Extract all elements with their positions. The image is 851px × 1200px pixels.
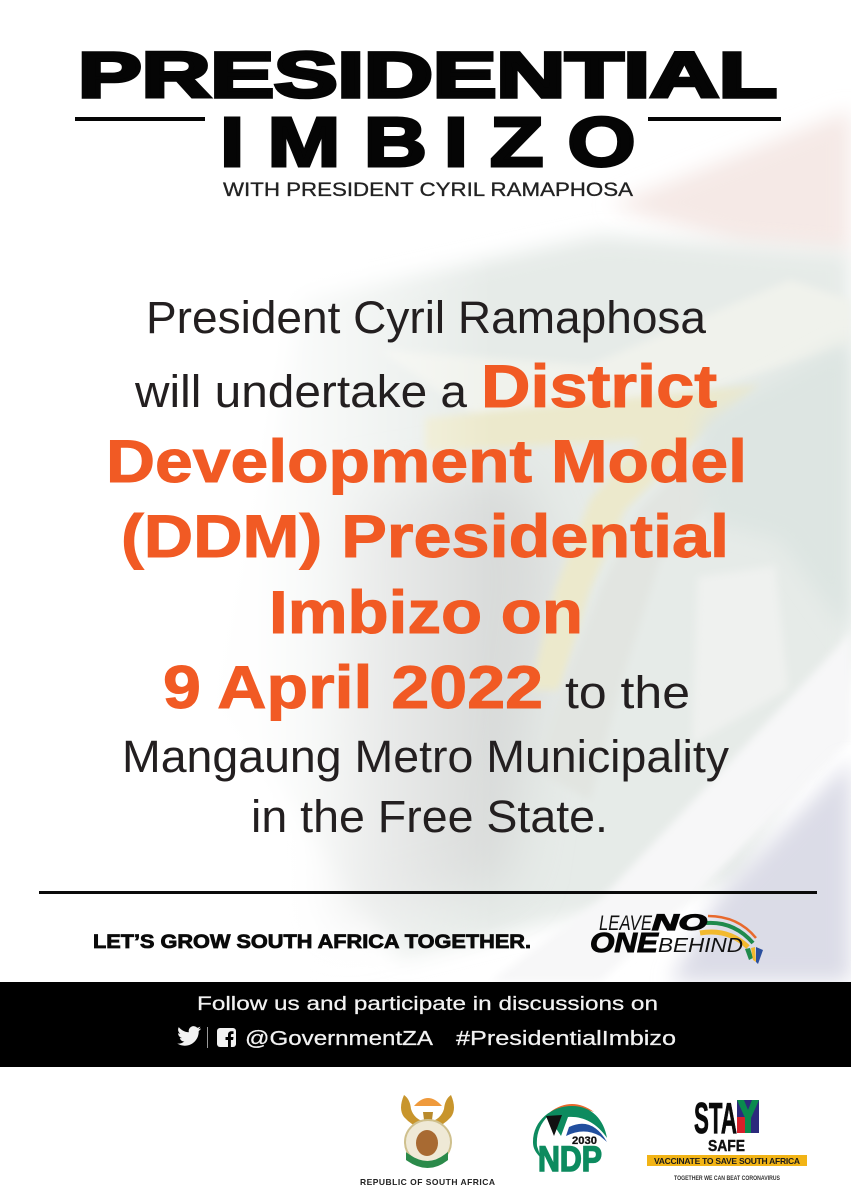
province line: in the Free State. — [251, 791, 608, 842]
icon: facebook — [217, 1028, 236, 1047]
stay flag Y — [737, 1100, 759, 1133]
title line: IMBIZO: IMBIZO — [220, 102, 636, 181]
logo words: LEAVE — [599, 912, 653, 935]
logo: Leave No One Behind — [590, 910, 763, 964]
vaccinate banner — [647, 1155, 807, 1166]
ndp arc blue — [566, 1124, 607, 1142]
arms sun — [414, 1098, 442, 1106]
safe word: SAFE — [708, 1138, 745, 1155]
hashtag: #PresidentialImbizo — [456, 1028, 676, 1050]
vaccinate text: VACCINATE TO SAVE SOUTH AFRICA — [654, 1156, 800, 1166]
arms right wing — [430, 1095, 454, 1130]
separator — [207, 1027, 208, 1048]
line 2 intro: will undertake a — [134, 366, 468, 417]
icon: twitter — [177, 1026, 201, 1046]
arms shield — [405, 1120, 451, 1164]
highlight: District: District — [481, 353, 717, 420]
line 1: President Cyril Ramaphosa — [146, 292, 707, 343]
arms bird — [423, 1112, 433, 1128]
rule right — [648, 117, 781, 121]
stay caption: TOGETHER WE CAN BEAT CORONAVIRUS — [674, 1176, 780, 1182]
divider rule — [39, 891, 817, 894]
logo: Leave No One Behind: NO — [652, 910, 707, 935]
social media band — [0, 982, 851, 1067]
ndp letters: NDP — [538, 1140, 602, 1179]
ndp ring green — [533, 1106, 607, 1158]
to the: to the — [565, 667, 690, 718]
logo: coat of arms — [360, 1095, 495, 1187]
highlight: Imbizo on: Imbizo on — [269, 579, 583, 646]
arms left wing — [401, 1095, 425, 1130]
logo: NDP 2030 — [533, 1104, 607, 1179]
logo flag ends — [745, 948, 753, 960]
logo: Stay Safe — [647, 1094, 807, 1182]
ndp year: 2030 — [572, 1135, 597, 1147]
subtitle: WITH PRESIDENT CYRIL RAMAPHOSA — [223, 180, 633, 201]
logo rainbow arcs — [700, 916, 756, 947]
ndp arc orange — [550, 1104, 594, 1112]
stay letters: STA — [694, 1094, 737, 1143]
band heading: Follow us and participate in discussions on — [197, 993, 658, 1015]
title — [75, 39, 781, 201]
highlight: Development Model: Development Model — [106, 428, 747, 495]
handle: @GovernmentZA — [245, 1028, 434, 1050]
highlight: date: 9 April 2022 — [163, 654, 543, 721]
slogan: LET’S GROW SOUTH AFRICA TOGETHER. — [93, 931, 531, 953]
venue line: Mangaung Metro Municipality — [122, 731, 730, 782]
logo: Leave No One Behind: ONE — [590, 927, 659, 958]
title line: PRESIDENTIAL: PRESIDENTIAL — [78, 39, 777, 111]
arms ribbon — [408, 1156, 446, 1166]
ndp black triangle — [546, 1115, 562, 1136]
logo: Leave No One Behind: BEHIND — [658, 935, 743, 957]
highlight: (DDM) Presidential: (DDM) Presidential — [121, 503, 729, 570]
rule left — [75, 117, 205, 121]
main announcement text — [106, 292, 747, 842]
arms caption: REPUBLIC OF SOUTH AFRICA — [360, 1177, 495, 1187]
